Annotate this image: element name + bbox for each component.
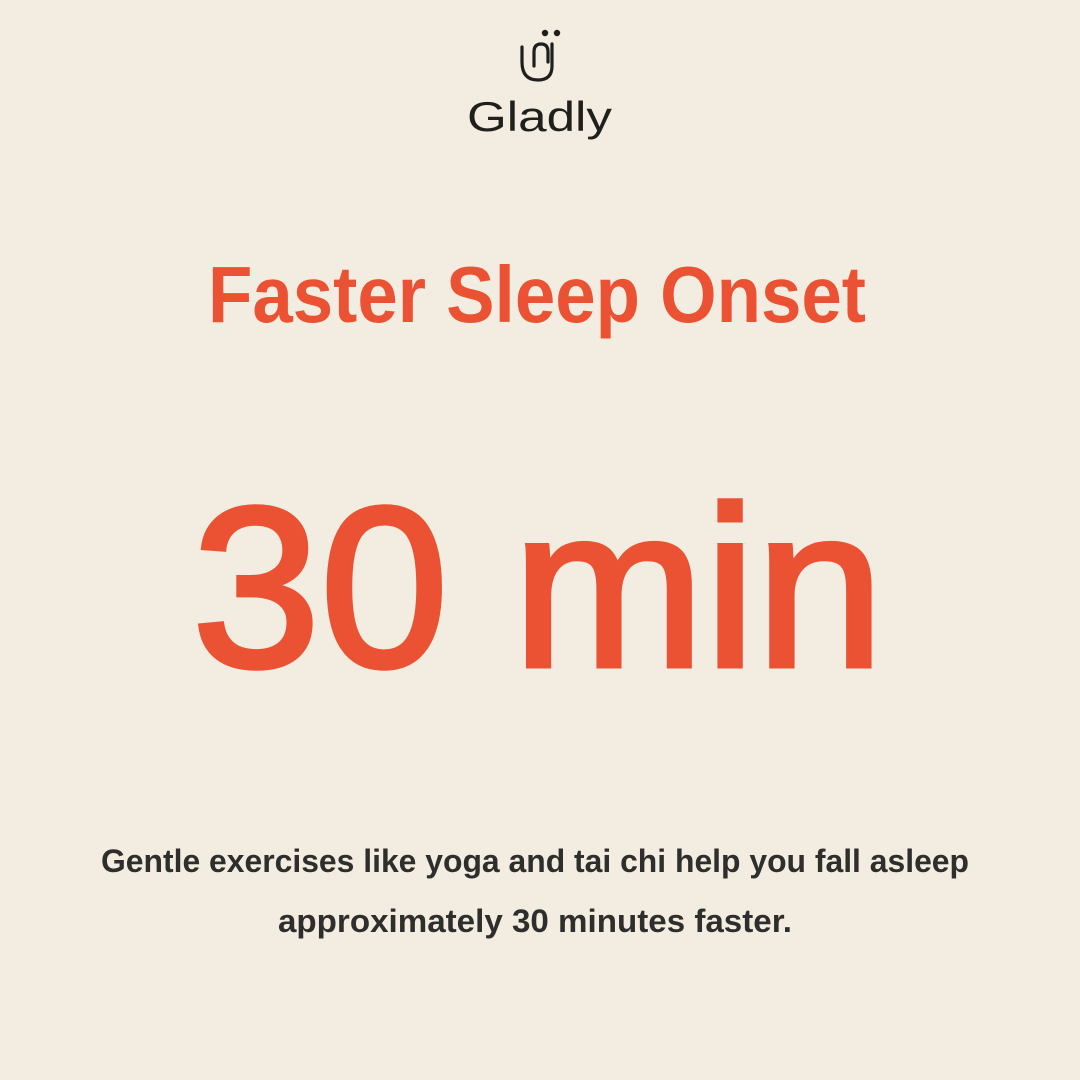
icon: logo mark (522, 31, 559, 80)
logo wordmark: Gladly (467, 93, 612, 140)
title: Faster Sleep Onset (208, 250, 866, 339)
body text (101, 843, 969, 939)
logo: Gladly (467, 31, 612, 140)
body text: approximately 30 minutes faster. (278, 903, 792, 939)
big stat: 30 min: 30 min (192, 461, 884, 715)
body text: Gentle exercises like yoga and tai chi help you fall asleep (101, 843, 969, 879)
